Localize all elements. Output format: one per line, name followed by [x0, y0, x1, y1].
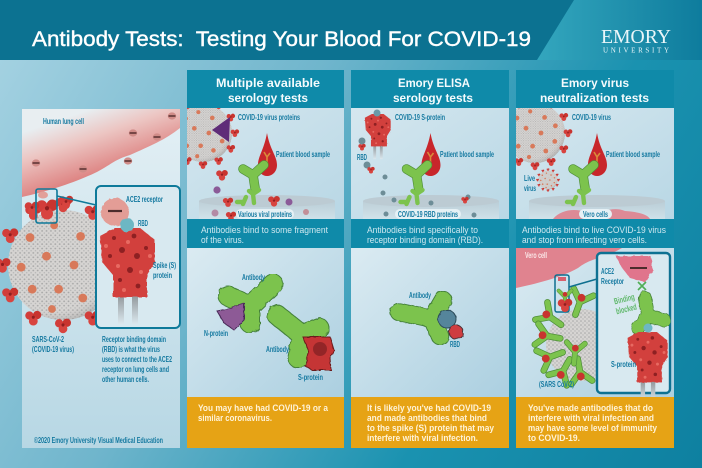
human lung cell [22, 109, 180, 197]
illustration labels: Patient blood sample [440, 149, 494, 159]
spike in highlight box [558, 277, 572, 312]
caption: Antibodies bind to some fragment [201, 225, 328, 235]
inset labels: blocked [615, 302, 638, 316]
virus label: SARS-CoV-2 [32, 334, 64, 344]
lower panel [351, 248, 509, 397]
Emory University logo: EMORY [601, 26, 671, 48]
lower labels [409, 290, 460, 349]
inset labels [601, 266, 638, 369]
dish [363, 195, 499, 219]
caption: and stop from infecting vero cells. [522, 235, 647, 245]
heading [516, 70, 674, 108]
inset labels: S-protein [611, 359, 636, 369]
lower labels [204, 272, 323, 382]
illustration labels: Live [524, 173, 535, 183]
dish [199, 195, 335, 219]
caption [516, 219, 674, 248]
copyright: ©2020 Emory University Visual Medical Education [34, 435, 163, 445]
caption: Antibodies bind specifically to [367, 225, 478, 235]
RBD explanation: Receptor binding domain [102, 334, 166, 344]
antibody with S-protein [277, 315, 334, 370]
caption: receptor binding domain (RBD). [367, 235, 483, 245]
header band [0, 0, 702, 60]
heading: serology tests [228, 91, 308, 105]
panel: Emory ELISA serology tests [351, 70, 509, 448]
blood drop and antibodies [237, 133, 277, 204]
blocking antibody [638, 298, 664, 328]
illustration labels: COVID-19 virus proteins [238, 112, 300, 122]
viral proteins [212, 170, 309, 221]
inset labels: protein [153, 270, 172, 280]
result box: interfere with viral infection and [528, 413, 654, 423]
label pill: Various viral proteins [238, 209, 292, 219]
heading [187, 70, 344, 108]
inset labels: ACE2 [601, 266, 614, 276]
Emory University logo: UNIVERSITY [603, 46, 669, 54]
spike protein [100, 228, 155, 324]
illustration labels: Patient blood sample [606, 149, 660, 159]
label: human lung cell: Human lung cell [43, 116, 84, 126]
result box: similar coronavirus. [198, 413, 272, 423]
label pill [579, 209, 612, 219]
blood drop and antibodies [400, 133, 440, 204]
lower labels: Antibody [409, 290, 431, 300]
result box: may have some level of immunity [528, 423, 658, 433]
caption [187, 219, 344, 248]
illustration labels [238, 112, 330, 159]
SARS-CoV-2 virus [0, 198, 132, 333]
illustration [351, 108, 509, 219]
panel: multiple available serology tests [187, 70, 344, 448]
label pill [395, 209, 461, 219]
spike protein [628, 332, 668, 402]
live virus [536, 168, 560, 192]
inset labels: ACE2 receptor [126, 194, 163, 204]
highlight box and connector [36, 189, 96, 223]
lung cell receptors [32, 112, 176, 173]
antibody with RBD [399, 300, 463, 339]
lower labels: N-protein [204, 328, 228, 338]
result box: You may have had COVID-19 or a [198, 403, 329, 413]
lower labels: Vero cell [525, 250, 547, 260]
virus with bound antibodies [532, 286, 596, 389]
virus label [32, 334, 74, 354]
result box: to the spike (S) protein that may [367, 423, 495, 433]
illustration labels: COVID-19 virus [572, 112, 611, 122]
RBD explanation: uses to connect to the ACE2 [102, 354, 172, 364]
lower panel [187, 248, 344, 397]
illustration [516, 108, 674, 219]
RBD [120, 218, 134, 232]
heading: Emory virus [561, 76, 629, 90]
illustration labels [524, 112, 660, 193]
heading: Multiple available [216, 76, 320, 90]
label pill [236, 209, 294, 219]
heading [351, 70, 509, 108]
panel: Emory virus neutralization tests [516, 70, 674, 448]
inset: binding blocked [597, 253, 670, 402]
inset labels: Spike (S) [153, 260, 176, 270]
RBD fragments [358, 138, 476, 218]
illustration [187, 108, 344, 219]
highlight box and connector [555, 275, 597, 312]
RBD explanation: other human cells. [102, 374, 149, 384]
caption: Antibodies bind to live COVID-19 virus [522, 225, 666, 235]
vero cells [553, 209, 650, 219]
result box: and made antibodies that bind [367, 413, 487, 423]
RBD explanation [102, 334, 172, 384]
result box: to COVID-19. [528, 433, 580, 443]
inset labels: Receptor [601, 276, 624, 286]
spike in highlighted box [25, 192, 73, 220]
lower panel [516, 248, 674, 402]
lower labels [525, 250, 574, 389]
result box: You've made antibodies that do [528, 403, 653, 413]
heading: serology tests [393, 91, 473, 105]
lower labels: (SARS CoV-2) [539, 379, 574, 389]
RBD explanation: receptor on lung cells and [102, 364, 169, 374]
inset labels: Binding [613, 292, 636, 306]
illustration labels: RBD [357, 152, 367, 162]
label pill: Vero cells [583, 209, 608, 219]
result box [351, 397, 509, 448]
caption: of the virus. [201, 235, 244, 245]
inset: ACE2 and spike [96, 186, 180, 328]
green cross [638, 282, 646, 290]
ACE2 receptor [101, 198, 129, 226]
RBD explanation: (RBD) is what the virus [102, 344, 160, 354]
spike protein [365, 110, 391, 159]
illustration labels: COVID-19 S-protein [395, 112, 445, 122]
inset labels [126, 194, 176, 280]
virus with cut-out wedge [187, 108, 240, 169]
inset labels: RBD [138, 218, 148, 228]
ACE2 receptor [616, 256, 653, 282]
lower labels: S-protein [298, 372, 323, 382]
result box: It is likely you've had COVID-19 [367, 403, 491, 413]
title: Antibody Tests: Testing Your Blood For COVID-19 [32, 27, 531, 51]
virus [516, 108, 572, 170]
blood drop and antibodies [567, 133, 607, 204]
lower labels: RBD [450, 339, 460, 349]
illustration labels: virus [524, 183, 536, 193]
illustration labels: Patient blood sample [276, 149, 330, 159]
RBD [644, 324, 652, 332]
caption [351, 219, 509, 248]
label pill: COVID-19 RBD proteins [398, 209, 458, 219]
result box: interfere with viral infection. [367, 433, 478, 443]
virus label: (COVID-19 virus) [32, 344, 74, 354]
result box [516, 397, 674, 448]
vero cell [516, 248, 622, 288]
result box [187, 397, 344, 448]
panel: how the virus attaches [0, 109, 180, 448]
antibody with N-protein [217, 284, 273, 330]
illustration labels [357, 112, 494, 162]
lower labels: Antibody [266, 344, 289, 354]
lower labels: Antibody [242, 272, 265, 282]
heading: neutralization tests [540, 91, 649, 105]
dish [529, 195, 665, 219]
heading: Emory ELISA [398, 76, 470, 90]
